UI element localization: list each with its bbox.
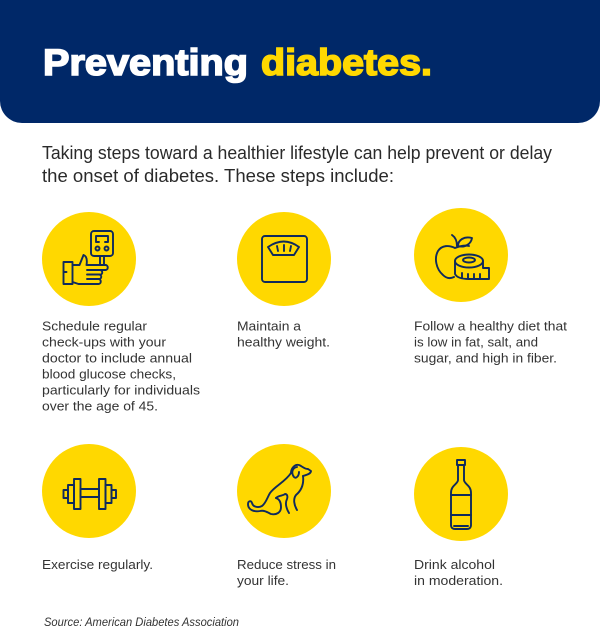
panel: exercise <box>42 444 153 572</box>
title <box>43 42 432 83</box>
panel: alcohol <box>414 447 508 588</box>
icon: glucose meter in hand <box>42 212 136 306</box>
icon: sitting dog <box>237 444 331 538</box>
text: stress <box>237 557 336 588</box>
title: Preventing <box>43 42 248 83</box>
text: check-ups <box>42 318 201 414</box>
text: exercise: Exercise regularly. <box>42 557 153 572</box>
panel: check-ups <box>42 212 201 414</box>
panel: weight <box>237 212 331 350</box>
text: diet: is low in fat, salt, and <box>414 334 538 350</box>
icon: apple and tape measure <box>414 208 508 302</box>
text: check-ups: Schedule regular <box>42 318 148 334</box>
text: weight: healthy weight. <box>237 334 330 350</box>
icon: wine bottle <box>414 447 508 541</box>
text: diet <box>414 318 567 366</box>
text: weight <box>237 318 330 350</box>
icon: scale <box>237 212 331 306</box>
text: check-ups: over the age of 45. <box>42 398 158 414</box>
text: check-ups: doctor to include annual <box>42 350 192 366</box>
text: diet: Follow a healthy diet that <box>414 318 567 334</box>
text: stress: your life. <box>237 573 289 588</box>
text: weight: Maintain a <box>237 318 302 334</box>
text: diet: sugar, and high in fiber. <box>414 350 557 366</box>
header banner <box>0 0 600 123</box>
panel: stress <box>237 444 336 588</box>
title: diabetes. <box>261 42 432 83</box>
text: check-ups: particularly for individuals <box>42 382 201 398</box>
intro text: Taking steps toward a healthier lifestyle can help prevent or delay <box>42 143 552 163</box>
text: alcohol <box>414 557 503 588</box>
text: alcohol: in moderation. <box>414 573 503 588</box>
source note: Source: American Diabetes Association <box>44 617 239 629</box>
text: check-ups: check-ups with your <box>42 334 167 350</box>
panel: diet <box>414 208 567 366</box>
text: alcohol: Drink alcohol <box>414 557 495 572</box>
text: check-ups: blood glucose checks, <box>42 366 176 382</box>
intro text <box>42 143 552 186</box>
icon: dumbbell <box>42 444 136 538</box>
intro text: the onset of diabetes. These steps include: <box>42 166 394 186</box>
text: stress: Reduce stress in <box>237 557 336 572</box>
